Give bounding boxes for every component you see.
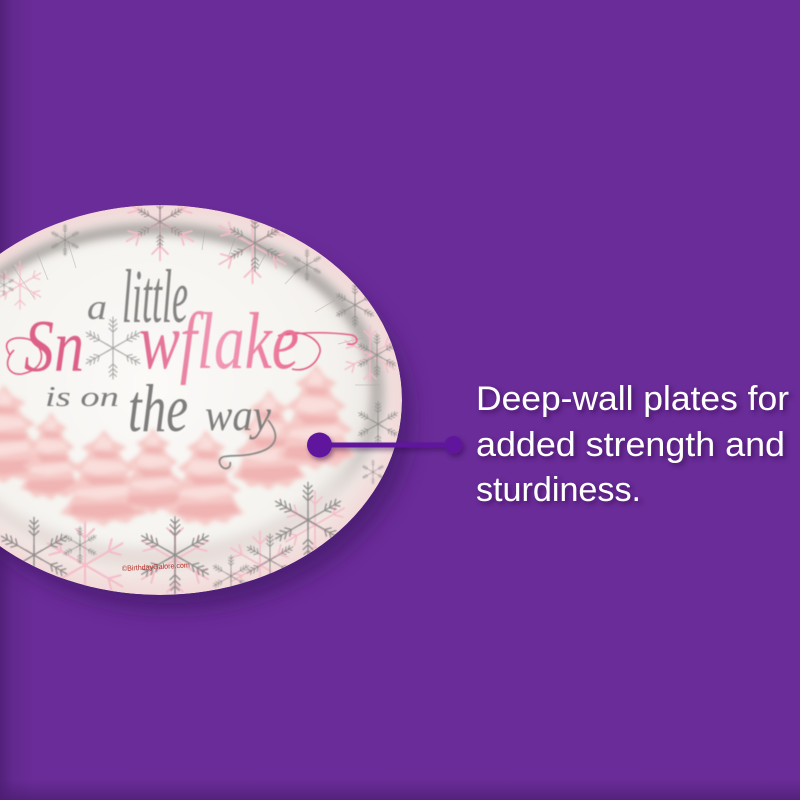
callout connector: [307, 432, 462, 458]
rim pleats: [12, 230, 380, 385]
callout text: sturdiness.: [476, 471, 641, 509]
a: a: [87, 287, 107, 327]
wflake: wflake: [139, 298, 299, 386]
y swash: [219, 420, 275, 468]
is on: is on: [45, 382, 119, 413]
copyright mark: ©BirthdayGalore.com: [122, 560, 190, 573]
plate lettering: little: [122, 255, 188, 339]
plate shadow: [0, 226, 412, 610]
rim grey snowflakes: [0, 197, 399, 597]
rim pink snowflakes: [0, 184, 398, 608]
plate lettering: [7, 255, 357, 468]
callout end dot: [444, 436, 462, 454]
plate rim: [0, 205, 402, 595]
callout text: Deep-wall plates for: [476, 380, 789, 418]
callout text: added strength and: [476, 426, 785, 464]
watercolour pine trees: [0, 364, 356, 526]
the: the: [128, 370, 188, 446]
Sn: Sn: [24, 306, 84, 388]
callout anchor dot: [307, 432, 332, 458]
inner wall shading: [0, 230, 377, 558]
plate: [0, 184, 402, 608]
callout text: [476, 380, 789, 509]
way: way: [205, 391, 271, 440]
plate well: [0, 237, 364, 547]
snowflake O: [84, 317, 142, 379]
Sn wflake swash: [7, 333, 357, 374]
